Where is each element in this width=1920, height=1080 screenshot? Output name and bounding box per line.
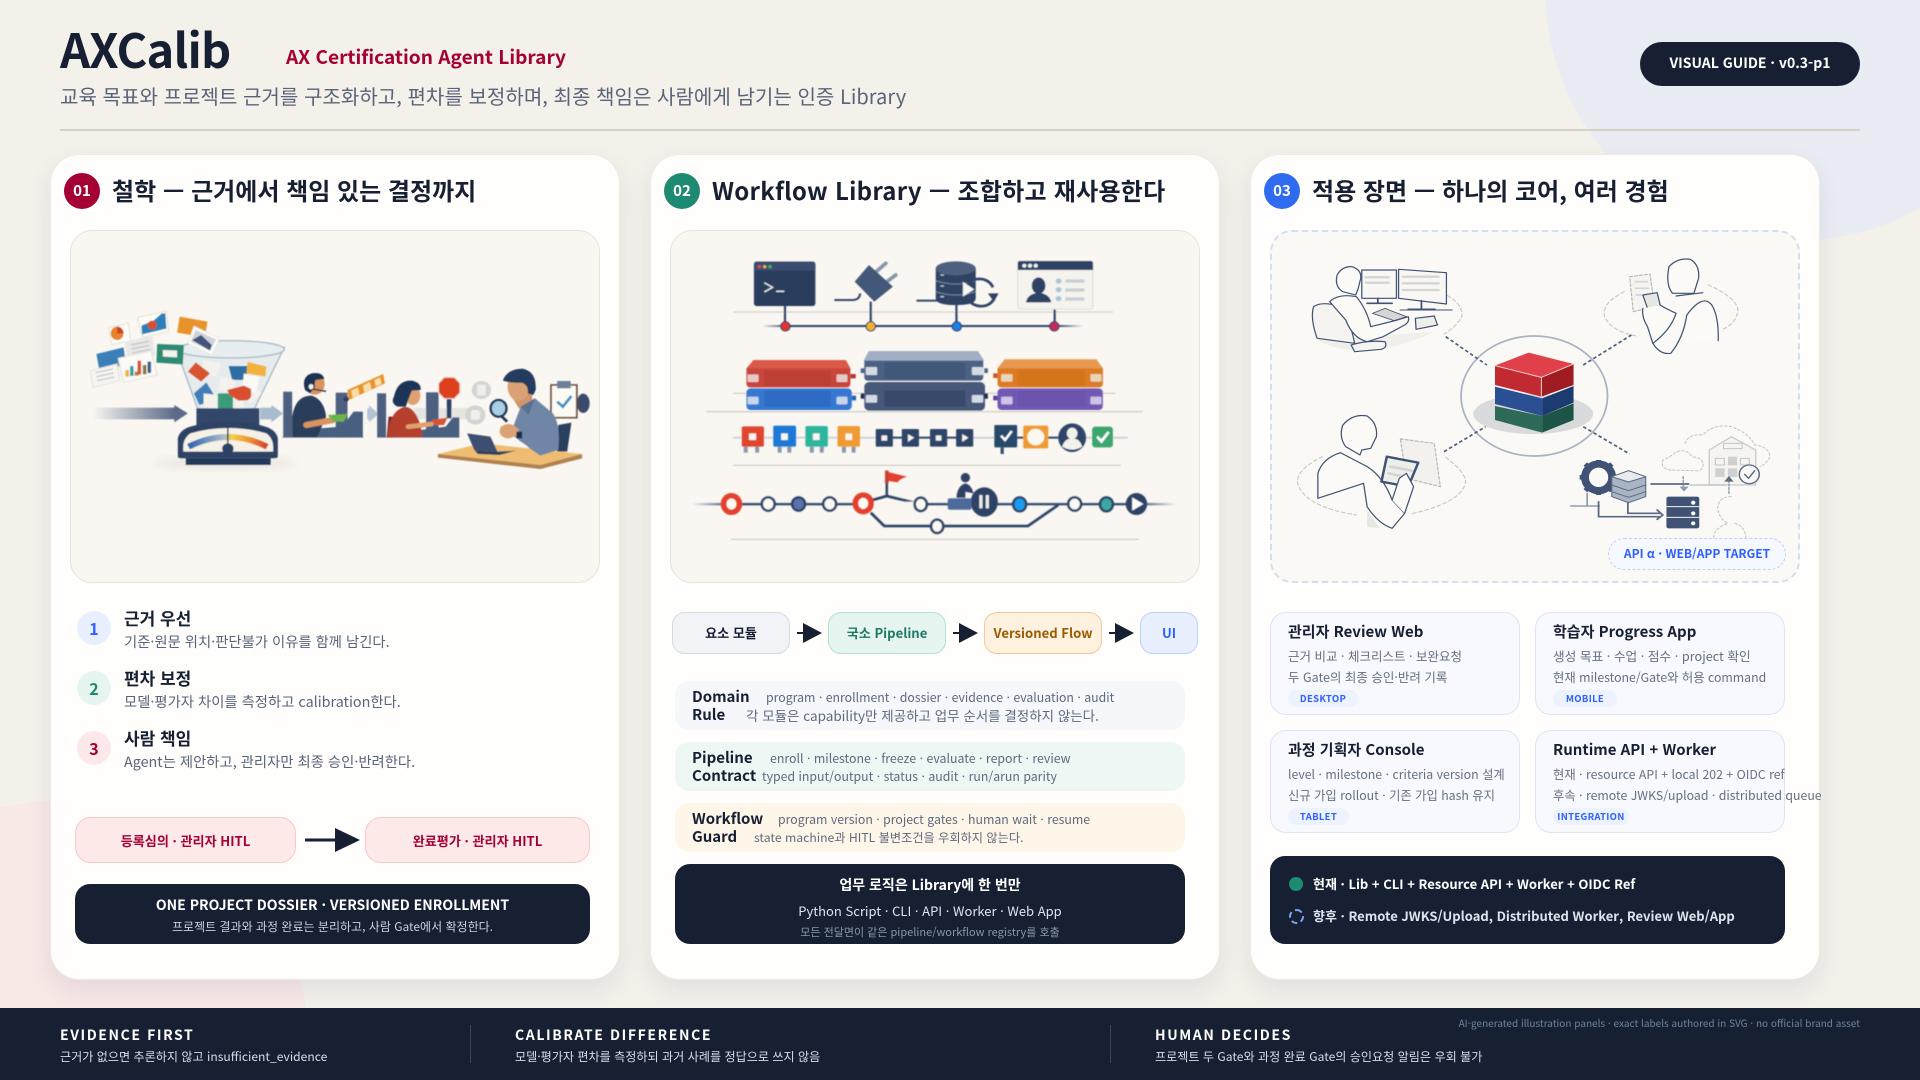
- row steps: enroll · milestone · freeze · evaluate · report · review: [770, 749, 1071, 767]
- flow: element modules: 요소 모듈: [705, 623, 757, 642]
- footer text: evidence first: 근거가 없으면 추론하지 않고 insufficient_evidence: [60, 1048, 327, 1065]
- card title: 과정 기획자 Console: [1288, 739, 1425, 760]
- top row: [785, 302, 1055, 327]
- flow: versioned flow: [984, 612, 1102, 654]
- panel: application scenes: [1251, 155, 1819, 979]
- card title: 관리자 Review Web: [1288, 621, 1423, 642]
- item 1 number: 1: [89, 616, 99, 640]
- row: workflow guard: [675, 803, 1185, 852]
- callout surfaces: Python Script · CLI · API · Worker · Web App: [798, 901, 1062, 920]
- gate: enrollment review: [75, 817, 296, 863]
- item 2 number: 2: [89, 676, 99, 700]
- funnel: [177, 347, 284, 412]
- tag tablet: [1288, 808, 1349, 825]
- arrow: [1109, 623, 1134, 643]
- card: course planner console: [1270, 730, 1520, 833]
- callout: library once: [675, 864, 1185, 944]
- card line 1: 생성 목표 · 수업 · 점수 · project 확인: [1553, 646, 1751, 664]
- row label: Domain: [692, 686, 750, 707]
- card line 1: 근거 비교 · 체크리스트 · 보완요청: [1288, 646, 1462, 664]
- core: [1461, 336, 1608, 456]
- badge 02: 02: [673, 180, 691, 201]
- heading: philosophy: 철학 — 근거에서 책임 있는 결정까지: [112, 172, 476, 207]
- row label: Contract: [692, 765, 756, 786]
- status future: 향후 · Remote JWKS/Upload, Distributed Worker, Review Web/App: [1313, 906, 1735, 925]
- card: learner progress app: [1535, 612, 1785, 715]
- blocks row: [733, 435, 1128, 440]
- item 2 number: [77, 671, 111, 705]
- illustration: core and audiences: [1270, 230, 1800, 583]
- title: AXCalib: [60, 13, 230, 82]
- tag desktop: [1288, 690, 1358, 707]
- row modules: program · enrollment · dossier · evidence · evaluation · audit: [766, 688, 1114, 706]
- item 3 number: [77, 731, 111, 765]
- tag tablet: TABLET: [1300, 809, 1337, 823]
- badge 03: [1264, 173, 1300, 209]
- row label: [692, 686, 750, 725]
- status current: 현재 · Lib + CLI + Resource API + Worker + OIDC Ref: [1313, 874, 1635, 893]
- footer heading: human decides: HUMAN DECIDES: [1155, 1025, 1292, 1045]
- item 2 text: 모델·평가자 차이를 측정하고 calibration한다.: [124, 691, 401, 712]
- documents: [108, 323, 130, 344]
- badge 03: 03: [1273, 180, 1291, 201]
- tag integration: INTEGRATION: [1557, 809, 1625, 823]
- flow: atomic pipeline: [828, 612, 946, 654]
- row label: Rule: [692, 704, 725, 725]
- gate: completion evaluation: [365, 817, 590, 863]
- row rule: 각 모듈은 capability만 제공하고 업무 순서를 결정하지 않는다.: [746, 704, 1099, 724]
- heading: scenes: 적용 장면 — 하나의 코어, 여러 경험: [1312, 172, 1669, 207]
- card line 1: level · milestone · criteria version 설계: [1288, 764, 1505, 782]
- operator one: [282, 437, 364, 438]
- scale: [196, 408, 259, 425]
- callout heading: 업무 로직은 Library에 한 번만: [839, 875, 1021, 895]
- panel: philosophy: [51, 155, 619, 979]
- badge 01: 01: [73, 180, 91, 201]
- row label: Pipeline: [692, 747, 753, 768]
- callout: one project dossier: [75, 884, 590, 944]
- card line 2: 신규 가입 rollout · 기존 가입 hash 유지: [1288, 786, 1495, 804]
- card title: Runtime API + Worker: [1553, 739, 1716, 760]
- row label: [692, 808, 763, 847]
- illustration: evidence funnel to human review: [70, 230, 600, 583]
- badge 02: [664, 173, 700, 209]
- reviewer: [577, 394, 590, 413]
- dot future: [1289, 909, 1304, 924]
- card: runtime api and worker: [1535, 730, 1785, 833]
- card line 2: 두 Gate의 최종 승인·반려 기록: [1288, 667, 1447, 686]
- footer heading: calibrate: CALIBRATE DIFFERENCE: [515, 1025, 712, 1045]
- item 1 number: [77, 611, 111, 645]
- row contract: typed input/output · status · audit · run/arun parity: [762, 767, 1057, 785]
- arrow: [797, 623, 822, 643]
- subtitle: 교육 목표와 프로젝트 근거를 구조화하고, 편차를 보정하며, 최종 책임은 사람에게 남기는 인증 Library: [60, 81, 906, 110]
- version pill: VISUAL GUIDE · v0.3-p1: [1669, 53, 1831, 73]
- footer band: [0, 1008, 1920, 1080]
- modules: [746, 360, 850, 387]
- row label: Guard: [692, 826, 737, 847]
- gate: enrollment review: 등록심의 · 관리자 HITL: [121, 831, 250, 850]
- tagline: AX Certification Agent Library: [286, 42, 566, 70]
- tag mobile: [1553, 690, 1617, 707]
- row label: [692, 747, 756, 786]
- version pill: [1640, 42, 1860, 86]
- operator two: [377, 437, 459, 438]
- card line 2: 후속 · remote JWKS/upload · distributed queue: [1553, 786, 1822, 804]
- flow: atomic pipeline: 국소 Pipeline: [847, 623, 927, 642]
- item 1 heading: 근거 우선: [124, 605, 191, 630]
- card line 1: 현재 · resource API + local 202 + OIDC ref: [1553, 764, 1785, 782]
- api tag: API α · WEB/APP TARGET: [1624, 545, 1770, 562]
- callout text: 프로젝트 결과와 과정 완료는 분리하고, 사람 Gate에서 확정한다.: [172, 918, 493, 935]
- card line 2: 현재 milestone/Gate와 허용 command: [1553, 668, 1766, 686]
- flow: versioned flow: Versioned Flow: [994, 623, 1092, 642]
- footer text: calibrate: 모델·평가자 편차를 측정하되 과거 사례를 정답으로 쓰지 않음: [515, 1048, 820, 1065]
- footer text: human decides: 프로젝트 두 Gate와 과정 완료 Gate의 승인요청 알림은 우회 불가: [1155, 1048, 1482, 1065]
- tag desktop: DESKTOP: [1300, 691, 1346, 705]
- row gates: program version · project gates · human wait · resume: [778, 810, 1090, 828]
- row: domain rule: [675, 681, 1185, 730]
- callout: status: [1270, 856, 1785, 944]
- row guard: state machine과 HITL 불변조건을 우회하지 않는다.: [754, 828, 1023, 846]
- item 1 text: 기준·원문 위치·판단불가 이유를 함께 남긴다.: [124, 631, 390, 652]
- tag mobile: MOBILE: [1566, 691, 1604, 705]
- badge 01: [64, 173, 100, 209]
- infrastructure: [1662, 426, 1770, 538]
- row label: Workflow: [692, 808, 763, 829]
- route row: [692, 503, 1176, 505]
- person at desk: [1312, 267, 1462, 352]
- heading: workflow: Workflow Library — 조합하고 재사용한다: [712, 172, 1165, 207]
- flow: element modules: [672, 612, 790, 654]
- item 2 heading: 편차 보정: [124, 665, 191, 690]
- dot current: [1289, 877, 1303, 891]
- panel: workflow library: [651, 155, 1219, 979]
- arrow: [305, 828, 360, 852]
- footer heading: evidence first: EVIDENCE FIRST: [60, 1025, 194, 1045]
- callout note: 모든 전달면이 같은 pipeline/workflow registry를 호출: [800, 924, 1060, 940]
- api tag: [1608, 538, 1786, 570]
- flow: UI: UI: [1162, 623, 1176, 642]
- person with phone: [1604, 259, 1738, 354]
- card: admin review web: [1270, 612, 1520, 715]
- card title: 학습자 Progress App: [1553, 621, 1696, 642]
- gate: completion evaluation: 완료평가 · 관리자 HITL: [413, 831, 542, 850]
- callout heading: ONE PROJECT DOSSIER · VERSIONED ENROLLMENT: [156, 894, 509, 914]
- illustration: modules and pipelines: [670, 230, 1200, 583]
- item 3 heading: 사람 책임: [124, 725, 191, 750]
- item 3 text: Agent는 제안하고, 관리자만 최종 승인·반려한다.: [124, 751, 415, 772]
- item 3 number: 3: [89, 736, 99, 760]
- row: pipeline contract: [675, 742, 1185, 791]
- footer note: AI-generated illustration panels · exact labels authored in SVG · no official brand asset: [1459, 1015, 1860, 1030]
- person with tablet: [1297, 416, 1465, 528]
- flow: UI: [1140, 612, 1198, 654]
- arrow: [953, 623, 978, 643]
- badges: [472, 381, 491, 399]
